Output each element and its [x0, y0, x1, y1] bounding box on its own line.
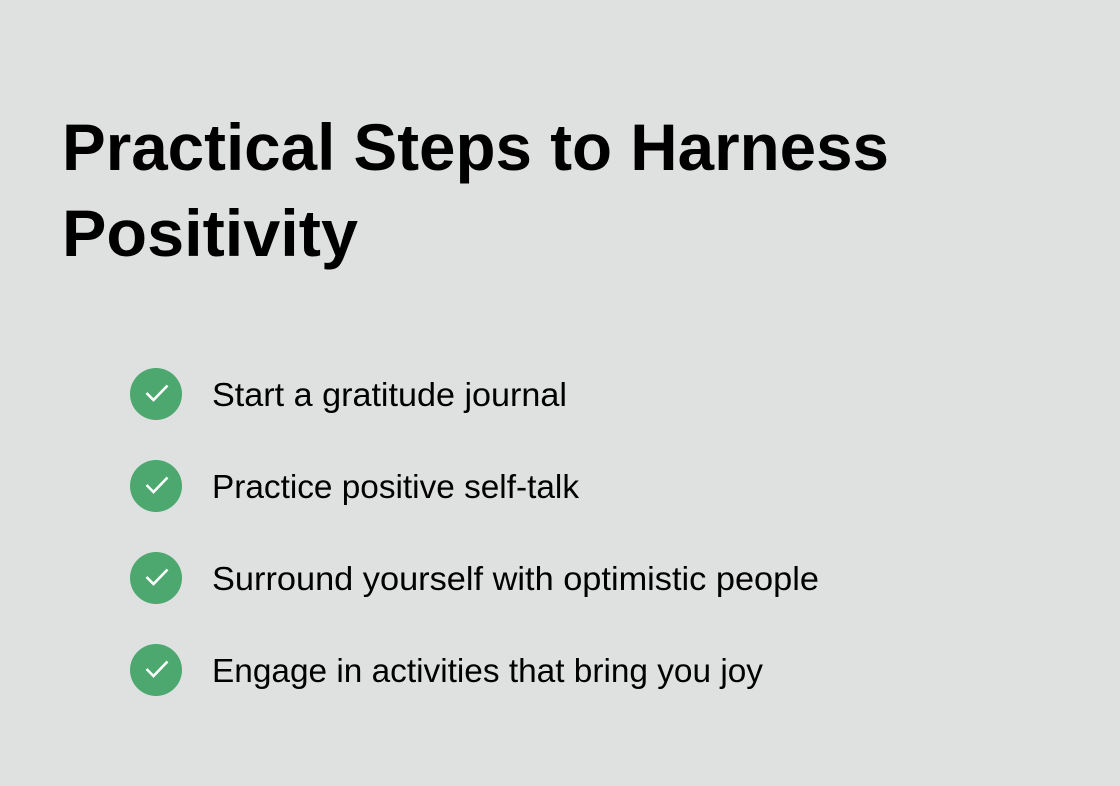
title	[62, 110, 889, 270]
item: activities that bring joy	[130, 644, 763, 696]
item: gratitude journal: Start a gratitude journal	[212, 376, 567, 413]
item: optimistic people: Surround yourself with optimistic people	[212, 560, 819, 597]
title: Practical Steps to Harness	[62, 110, 889, 184]
checklist	[130, 368, 819, 696]
item: activities that bring joy: Engage in activities that bring you joy	[212, 652, 763, 689]
item: optimistic people	[130, 552, 819, 604]
title: Positivity	[62, 196, 358, 270]
item: positive self-talk	[130, 460, 579, 512]
item: positive self-talk: Practice positive self-talk	[212, 468, 579, 505]
item: gratitude journal	[130, 368, 567, 420]
